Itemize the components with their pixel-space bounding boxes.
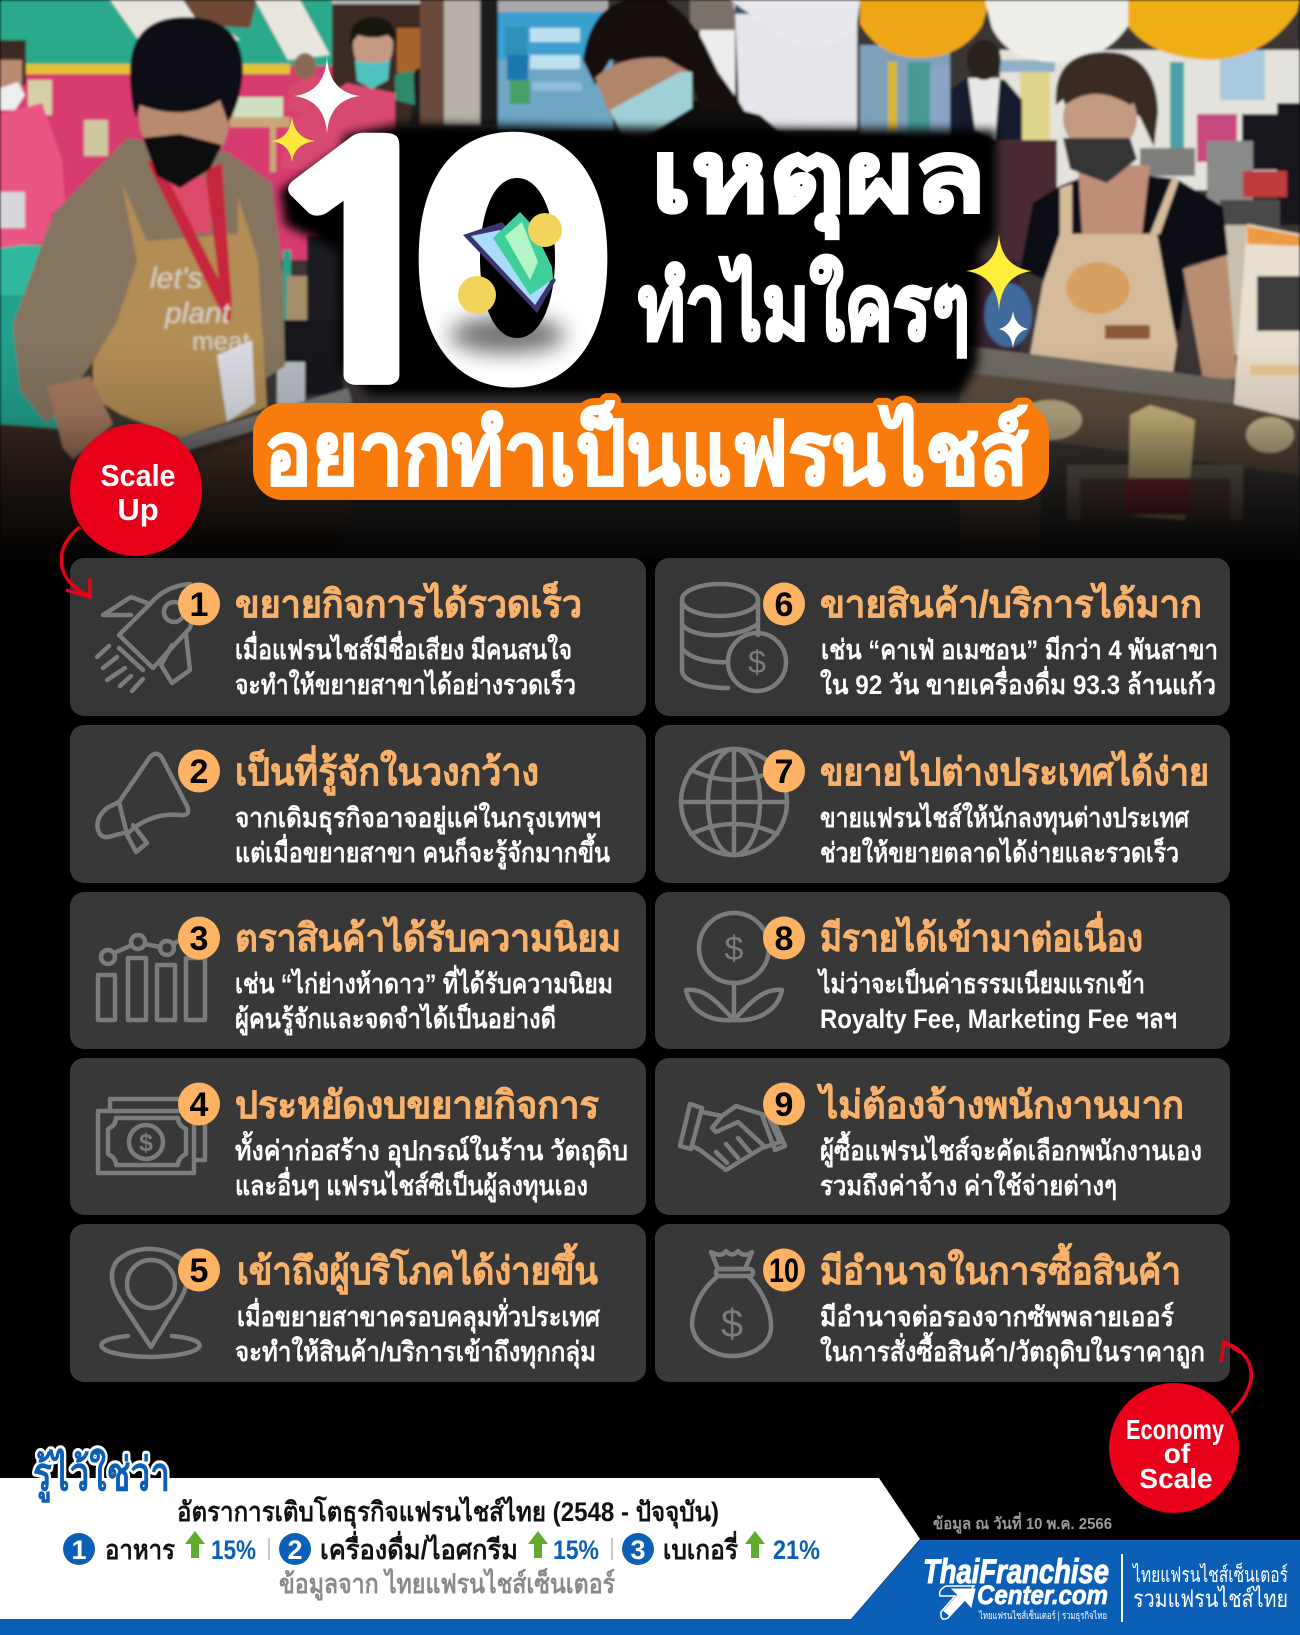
sparkle: right small white — [999, 311, 1028, 348]
badge 9: 9 — [775, 1086, 793, 1124]
title number 10: 1 — [246, 113, 480, 426]
text: source: ข้อมูลจาก ไทยแฟรนไชส์เซ็นเตอร์ — [279, 1566, 615, 1601]
title number 10 — [246, 0, 616, 472]
sparkle: large white — [294, 57, 360, 134]
body 3: ผู้คนรู้จักและจดจำได้เป็นอย่างดี — [235, 1001, 556, 1036]
body 6: ใน 92 วัน ขายเครื่องดื่ม 93.3 ล้านแก้ว — [820, 665, 1216, 700]
stat: drinks: 2 — [287, 1535, 303, 1565]
icon: banknotes — [98, 1099, 205, 1173]
stat: bakery: เบเกอรี่ — [663, 1530, 738, 1565]
body 4: และอื่นๆ แฟรนไชส์ซีเป็นผู้ลงทุนเอง — [235, 1166, 588, 1203]
badge 4: 4 — [190, 1086, 209, 1124]
icon: handshake — [680, 1104, 785, 1170]
badge 8: 8 — [775, 920, 793, 958]
main man — [0, 420, 340, 560]
body 1 — [235, 630, 576, 700]
icon: megaphone — [97, 754, 188, 852]
badge 4 — [178, 1082, 220, 1126]
photo: franchise booths with vendors: meat — [192, 326, 251, 356]
callout: Economy of Scale: Economy — [1126, 1414, 1224, 1445]
badge 1: 1 — [190, 586, 208, 624]
body 2: จากเดิมธุรกิจอาจอยู่แค่ในกรุงเทพฯ — [235, 802, 601, 835]
stat: drinks: เครื่องดื่ม/ไอศกรีม — [320, 1530, 518, 1565]
badge 2: 2 — [190, 753, 208, 791]
sparkle: small yellow — [272, 116, 315, 162]
icon: coin stack — [682, 584, 786, 691]
middle woman — [620, 100, 790, 200]
body 1: จะทำให้ขยายสาขาได้อย่างรวดเร็ว — [235, 667, 576, 700]
stat: food: 1 — [71, 1535, 87, 1565]
body 7: ช่วยให้ขยายตลาดได้ง่ายและรวดเร็ว — [820, 835, 1179, 868]
body 9 — [820, 1130, 1202, 1201]
arrow: Scale Up to reason 1 — [61, 527, 90, 597]
callout: Economy of Scale — [1109, 1383, 1239, 1513]
text: logo tagline — [1132, 1561, 1288, 1613]
photo: franchise booths with vendors: let's — [150, 262, 202, 295]
body 7 — [820, 802, 1190, 868]
body 10: ในการสั่งซื้อสินค้า/วัตถุดิบในราคาถูก — [820, 1331, 1205, 1369]
body 7: ขายแฟรนไชส์ให้นักลงทุนต่างประเทศ — [820, 802, 1190, 835]
stat: food — [63, 1531, 256, 1565]
separator — [611, 1538, 613, 1560]
awning — [860, 0, 990, 58]
panel: did you know — [0, 1478, 920, 1619]
callout: Scale Up: Scale — [100, 458, 176, 493]
QR sign — [1233, 224, 1300, 421]
logo: ThaiFranchise Center — [923, 1553, 1109, 1622]
stat: bakery: 3 — [630, 1535, 646, 1565]
callout: Economy of Scale: of — [1164, 1438, 1191, 1469]
photo fade to black — [0, 340, 1300, 590]
blue glove — [984, 283, 1032, 347]
icon: globe — [681, 749, 787, 855]
body 5 — [235, 1297, 601, 1369]
body 1: เมื่อแฟรนไชส์มีชื่อเสียง มีคนสนใจ — [235, 630, 572, 665]
text: growth rate heading: อัตราการเติบโตธุรกิจแฟรนไชส์ไทย (2548 - ปัจจุบัน) — [177, 1495, 719, 1529]
logo: ThaiFranchise Center: ThaiFranchise — [923, 1553, 1109, 1591]
badge 3: 3 — [190, 920, 208, 958]
stat: food: 15% — [211, 1535, 256, 1565]
body 3: เช่น “ไก่ย่างห้าดาว” ที่ได้รับความนิยม — [235, 964, 613, 999]
badge 6: 6 — [775, 586, 793, 624]
icon: money bag — [692, 1251, 771, 1356]
callout: Scale Up: Up — [117, 492, 159, 527]
badge 3 — [178, 916, 220, 960]
banner: อยากทำเป็นแฟรนไชส์: อยากทำเป็นแฟรนไชส์ — [264, 400, 1028, 503]
badge 5 — [178, 1248, 220, 1292]
title backdrop halo — [280, 124, 996, 395]
stat: drinks — [279, 1530, 599, 1565]
title 8: มีรายได้เข้ามาต่อเนื่อง — [820, 911, 1143, 960]
divider — [1121, 1554, 1123, 1622]
body 3 — [235, 964, 613, 1036]
panel: reason 4 — [70, 1058, 646, 1215]
panel: reason 7 — [655, 725, 1230, 883]
body 8: ไม่ว่าจะเป็นค่าธรรมเนียมแรกเข้า — [816, 966, 1145, 999]
body 8 — [816, 966, 1177, 1034]
panel: reason 1 — [70, 558, 646, 716]
panel: reason 8 — [655, 892, 1230, 1049]
body 5: จะทำให้สินค้า/บริการเข้าถึงทุกกลุ่ม — [235, 1336, 596, 1369]
badge 9 — [763, 1082, 805, 1126]
body 8: Royalty Fee, Marketing Fee ฯลฯ — [820, 1004, 1177, 1034]
title 6: ขายสินค้า/บริการได้มาก — [820, 582, 1202, 626]
badge 1 — [178, 582, 220, 626]
shadow under money icon — [449, 317, 565, 353]
badge 7 — [763, 750, 805, 792]
stat row — [63, 1530, 820, 1565]
panel: reason 5 — [70, 1224, 646, 1382]
icon: money plant — [686, 913, 782, 1020]
sparkle: right yellow — [966, 234, 1032, 311]
icon: coin stack: $ — [748, 644, 766, 680]
body 4 — [235, 1130, 628, 1203]
panel: reason 2 — [70, 725, 646, 883]
heading: เหตุผล: เหตุผล — [651, 121, 986, 239]
body 5: เมื่อขยายสาขาครอบคลุมทั่วประเทศ — [237, 1297, 601, 1334]
stat: bakery: 21% — [773, 1535, 820, 1565]
title 10: มีอำนาจในการซื้อสินค้า — [820, 1243, 1181, 1293]
logo: ThaiFranchise Center: Center.com — [977, 1580, 1108, 1610]
hole of the zero — [480, 178, 555, 338]
stat: drinks: 15% — [553, 1535, 599, 1565]
separator — [268, 1538, 270, 1560]
callout: Scale Up — [70, 424, 202, 556]
icon: money plant: $ — [725, 930, 744, 968]
icon: rocket — [97, 584, 194, 691]
body 6: เช่น “คาเฟ่ อเมซอน” มีกว่า 4 พันสาขา — [821, 635, 1218, 665]
panel: reason 9 — [655, 1058, 1230, 1215]
title 2: เป็นที่รู้จักในวงกว้าง — [235, 745, 539, 796]
icon: money bag: $ — [721, 1302, 743, 1346]
title 1: ขยายกิจการได้รวดเร็ว — [235, 581, 582, 626]
banner: อยากทำเป็นแฟรนไชส์: อยากทำเป็นแฟรนไชส์ — [264, 400, 1028, 503]
panel: reason 10 — [655, 1224, 1230, 1382]
title 3: ตราสินค้าได้รับความนิยม — [235, 916, 621, 960]
right woman — [1020, 170, 1228, 331]
body 9: รวมถึงค่าจ้าง ค่าใช้จ่ายต่างๆ — [820, 1170, 1117, 1201]
white stall props — [690, 0, 740, 30]
icon: banknotes: $ — [139, 1129, 153, 1157]
title 7: ขยายไปต่างประเทศได้ง่าย — [820, 750, 1209, 794]
badge 7: 7 — [775, 753, 793, 791]
badge 10: 10 — [769, 1252, 799, 1290]
arrow: Economy of Scale to reason 10 — [1221, 1342, 1251, 1413]
body 10 — [820, 1301, 1205, 1369]
panel: reason 6 — [655, 558, 1230, 716]
title number 10: 0 — [410, 0, 616, 472]
callout: Economy of Scale: Scale — [1139, 1463, 1213, 1494]
stat: bakery — [622, 1530, 820, 1565]
body 10: มีอำนาจต่อรองจากซัพพลายเออร์ — [820, 1301, 1174, 1332]
body 4: ทั้งค่าก่อสร้าง อุปกรณ์ในร้าน วัตถุดิบ — [235, 1130, 628, 1168]
icon: logo arrow — [940, 1586, 975, 1619]
panel: reason 3 — [70, 892, 646, 1049]
counter and griddle — [960, 345, 1233, 404]
heading: ทำไมใครๆ: ทำไมใครๆ — [638, 255, 970, 359]
body 2: แต่เมื่อขยายสาขา คนก็จะรู้จักมากขึ้น — [235, 832, 610, 870]
badge 2 — [178, 750, 220, 792]
body 6 — [820, 635, 1218, 700]
logo: ThaiFranchise Center: ไทยแฟรนไชส์เซ็นเตอร์ | รวมธุรกิจไทย — [978, 1608, 1107, 1622]
text: data date: ข้อมูล ณ วันที่ 10 พ.ค. 2566 — [933, 1512, 1112, 1535]
body 9: ผู้ซื้อแฟรนไชส์จะคัดเลือกพนักงานเอง — [820, 1130, 1202, 1168]
stat: food: อาหาร — [105, 1535, 175, 1565]
icon: location pin — [101, 1249, 200, 1357]
badge 6 — [763, 582, 805, 626]
heading: รู้ไว้ใช่ว่า: รู้ไว้ใช่ว่า — [33, 1447, 170, 1503]
body 2 — [235, 802, 610, 870]
title 9: ไม่ต้องจ้างพนักงานมาก — [816, 1083, 1184, 1127]
photo: franchise booths with vendors — [0, 0, 1300, 560]
footer band and logo area — [0, 1540, 1300, 1635]
title 4: ประหยัดงบขยายกิจการ — [235, 1085, 600, 1127]
photo: franchise booths with vendors: plant — [164, 297, 232, 330]
badge 8 — [763, 916, 805, 960]
badge 5: 5 — [190, 1252, 208, 1290]
title 5: เข้าถึงผู้บริโภคได้ง่ายขึ้น — [237, 1243, 598, 1295]
icon: phone with money and coins — [458, 212, 562, 314]
icon: bar chart — [98, 935, 205, 1020]
